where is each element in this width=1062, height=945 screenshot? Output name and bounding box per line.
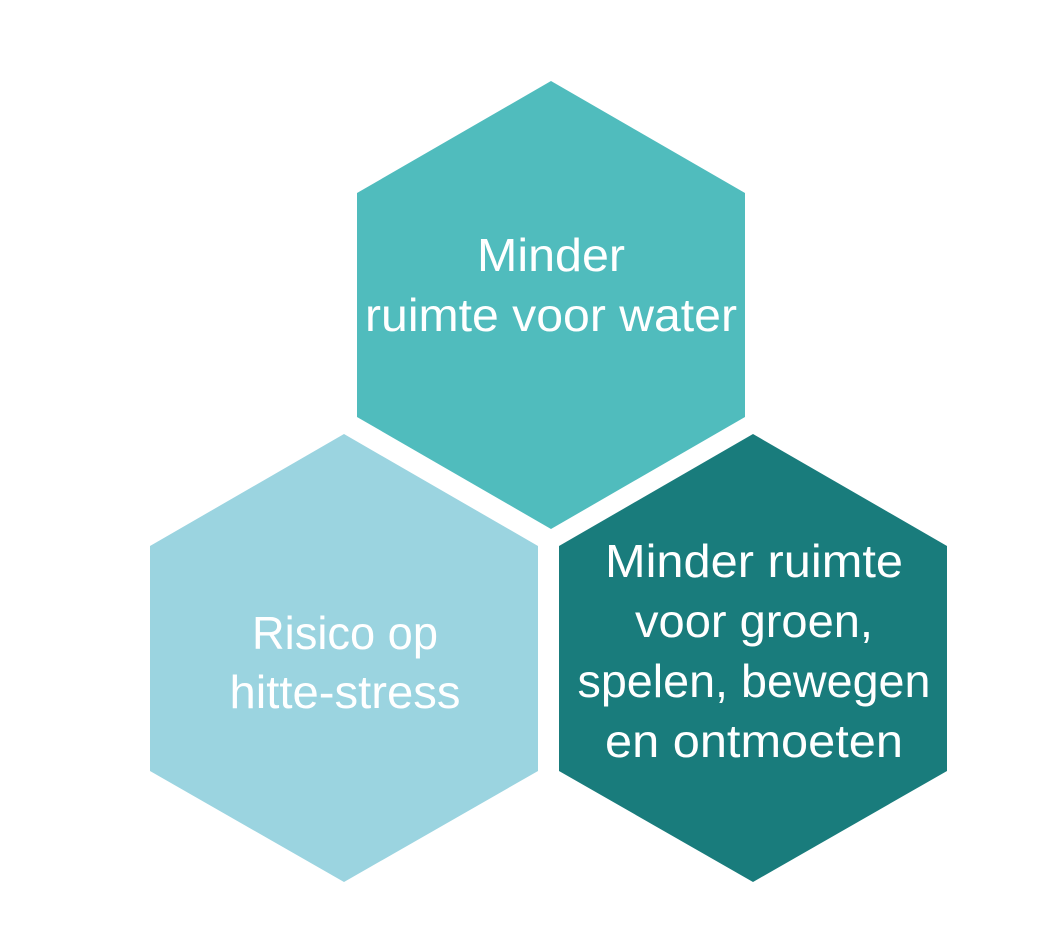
panel: minder ruimte voor water: Minder xyxy=(477,229,625,281)
panel: minder ruimte voor groen, spelen, bewegen en ontmoeten: spelen, bewegen xyxy=(578,655,930,707)
panel: minder ruimte voor groen, spelen, bewegen en ontmoeten: voor groen, xyxy=(635,595,873,647)
panel: minder ruimte voor water: ruimte voor water xyxy=(365,289,737,341)
panel: minder ruimte voor groen, spelen, bewegen en ontmoeten: en ontmoeten xyxy=(605,715,903,767)
panel: minder ruimte voor groen, spelen, bewegen en ontmoeten: Minder ruimte xyxy=(605,535,903,587)
panel: risico op hitte-stress xyxy=(150,434,538,882)
panel: minder ruimte voor groen, spelen, bewegen en ontmoeten xyxy=(559,434,947,882)
panel: risico op hitte-stress: hitte-stress xyxy=(230,666,460,718)
panel: minder ruimte voor water xyxy=(357,81,745,529)
panel: risico op hitte-stress: Risico op xyxy=(252,607,438,659)
